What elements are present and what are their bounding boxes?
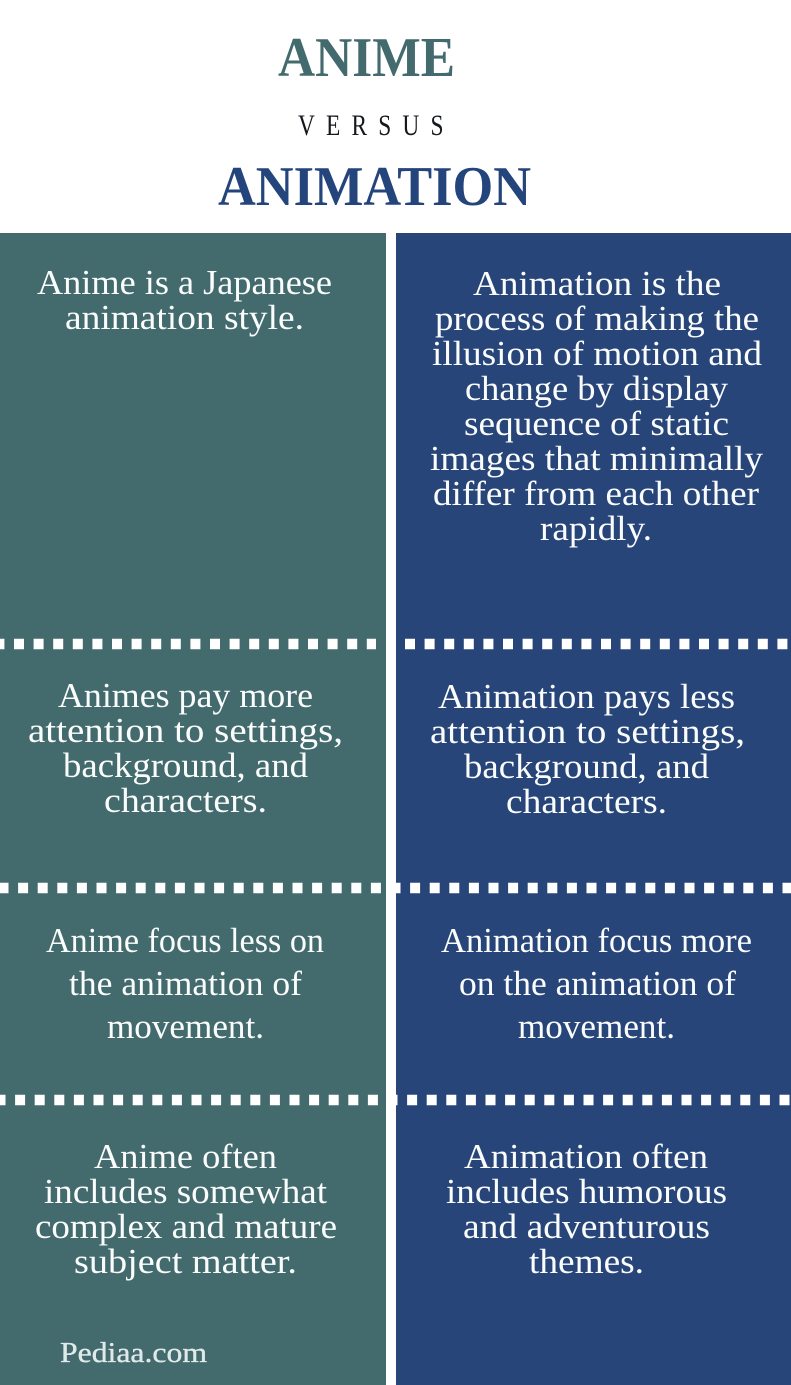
text: animation movement (441, 921, 752, 1046)
text: animation definition (430, 264, 764, 548)
text: anime settings: Animes pay more (58, 676, 313, 715)
text: anime definition: animation style. (65, 298, 304, 337)
text: animation definition: Animation is the (473, 264, 721, 303)
text: animation themes: themes. (529, 1242, 644, 1281)
text: animation definition: sequence of static (464, 404, 729, 443)
text: anime movement: the animation of (69, 964, 302, 1003)
title: animation: ANIMATION (218, 156, 531, 218)
text: animation movement: on the animation of (459, 964, 736, 1003)
text: animation settings: characters. (506, 782, 667, 821)
text: anime settings (28, 676, 343, 820)
text: anime subject matter: subject matter. (74, 1242, 297, 1281)
text: anime definition (37, 263, 332, 337)
text: anime settings: characters. (104, 781, 267, 820)
text: animation movement: Animation focus more (441, 921, 752, 960)
text: anime settings: attention to settings, (28, 711, 343, 750)
text: anime subject matter: complex and mature (35, 1207, 337, 1246)
text: animation definition: change by display (465, 369, 729, 408)
text: anime subject matter: includes somewhat (44, 1172, 327, 1211)
text: animation definition: rapidly. (540, 509, 652, 548)
text: animation settings: attention to settings, (430, 712, 745, 751)
title: versus: VERSUS (298, 108, 455, 142)
text: animation definition: illusion of motion and (432, 334, 763, 373)
text: animation themes: and adventurous (463, 1207, 710, 1246)
text: animation settings: Animation pays less (438, 677, 735, 716)
panel: anime column (0, 233, 386, 1385)
text: animation themes: Animation often (464, 1137, 708, 1176)
text: animation definition: process of making the (435, 299, 759, 338)
text: anime definition: Anime is a Japanese (37, 263, 332, 302)
text: anime movement: movement. (107, 1007, 264, 1046)
text: animation themes: includes humorous (446, 1172, 727, 1211)
text: anime settings: background, and (63, 746, 309, 785)
text: animation settings: background, and (464, 747, 710, 786)
title: anime: ANIME (278, 27, 455, 89)
text: animation movement: movement. (518, 1007, 675, 1046)
logo: Pediaa.com: Pediaa.com (60, 1337, 207, 1369)
text: animation settings (430, 677, 745, 821)
text: anime subject matter: Anime often (94, 1137, 277, 1176)
text: animation definition: images that minimally (430, 439, 764, 478)
text: anime movement: Anime focus less on (46, 921, 324, 960)
text: anime subject matter (35, 1137, 337, 1281)
text: anime movement (46, 921, 324, 1046)
panel: animation column (396, 233, 791, 1385)
text: animation themes (446, 1137, 727, 1281)
text: animation definition: differ from each other (433, 474, 759, 513)
